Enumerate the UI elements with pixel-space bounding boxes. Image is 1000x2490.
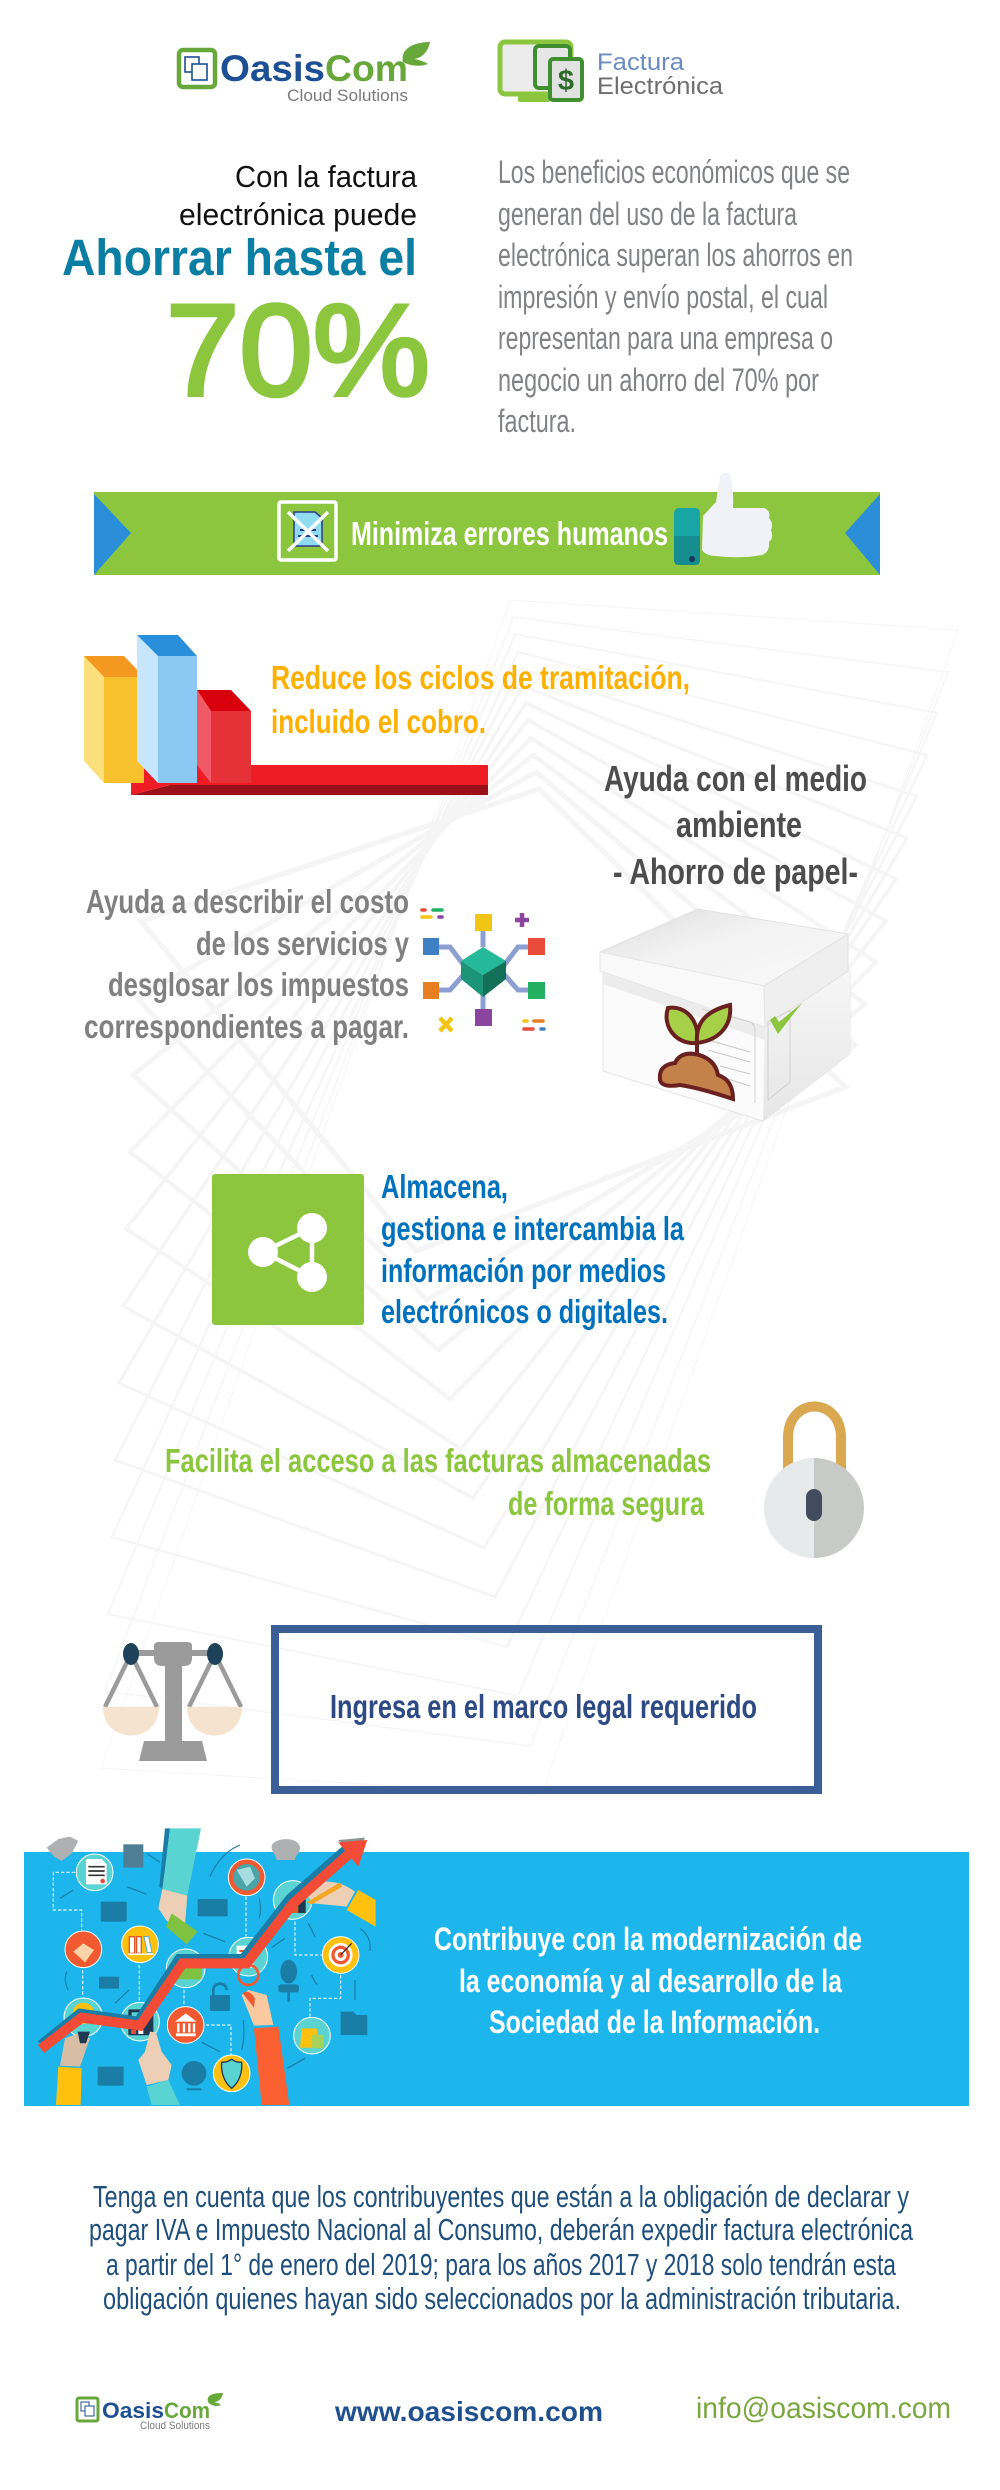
icon: crossed document xyxy=(279,502,336,560)
hands and sleeves xyxy=(56,1828,376,2105)
headline: ahorro 70%: Ahorrar hasta el xyxy=(62,229,417,286)
text block: aviso xyxy=(89,2179,914,2316)
panel: almacena xyxy=(212,1168,684,1330)
headline: ahorro 70%: 70% xyxy=(166,277,430,423)
banner ribbon xyxy=(94,492,880,575)
banner label: Minimiza errores humanos xyxy=(351,515,668,552)
text: almacena: información por medios xyxy=(381,1252,666,1289)
background icons xyxy=(98,1899,367,2090)
text: contribuye xyxy=(434,1921,862,2040)
text block: beneficios xyxy=(498,154,853,439)
text block: beneficios: electrónica superan los ahorros en xyxy=(498,237,853,273)
dashed connectors xyxy=(53,1872,341,2055)
footer logo xyxy=(77,2393,223,2432)
factura label: Factura xyxy=(597,49,685,76)
circle contents xyxy=(73,1859,353,2088)
text: facilita el acceso: Facilita el acceso a las facturas almacenadas xyxy=(165,1442,711,1479)
text: contribuye: Contribuye con la modernización de xyxy=(434,1921,862,1957)
text: describir el costo: Ayuda a describir el costo xyxy=(86,883,409,920)
bar base xyxy=(131,765,488,795)
chart: 3D bars xyxy=(84,635,488,795)
headline: ahorro 70% xyxy=(62,159,430,423)
text block: beneficios: representan para una empresa o xyxy=(498,320,833,356)
text: medio ambiente: Ayuda con el medio xyxy=(604,758,867,799)
text block: beneficios: Los beneficios económicos que se xyxy=(498,154,850,190)
icon: archive box with plant xyxy=(600,909,850,1121)
banner: minimiza errores humanos xyxy=(94,472,880,575)
logo mark xyxy=(179,50,215,87)
footer logo: Com xyxy=(164,2398,210,2423)
footer email: info@oasiscom.com xyxy=(696,2392,951,2425)
panel: marco legal xyxy=(275,1629,818,1790)
text: contribuye: Sociedad de la Información. xyxy=(489,2004,820,2040)
factura label xyxy=(597,49,724,100)
text: marco legal: Ingresa en el marco legal requerido xyxy=(330,1688,757,1725)
gray icons above band xyxy=(47,1837,300,1861)
text: describir el costo xyxy=(84,883,409,1045)
text: medio ambiente: - Ahorro de papel- xyxy=(613,851,858,892)
headline: ahorro 70%: electrónica puede xyxy=(179,197,417,232)
text: describir el costo: correspondientes a pagar. xyxy=(84,1008,409,1045)
logo: Factura Electrónica xyxy=(500,42,724,102)
footer website: www.oasiscom.com xyxy=(334,2396,603,2427)
text: almacena: Almacena, xyxy=(381,1168,508,1205)
green check xyxy=(770,1003,802,1034)
logo: OasisCom header xyxy=(179,42,430,105)
yellow bar xyxy=(84,656,144,783)
footer logo: Oasis xyxy=(102,2398,164,2423)
text: reduce los ciclos: incluido el cobro. xyxy=(271,703,486,740)
text: contribuye: la economía y al desarrollo de la xyxy=(459,1963,842,1999)
icon: padlock xyxy=(764,1406,864,1558)
panel: modernización band xyxy=(24,1852,969,2106)
text block: beneficios: factura. xyxy=(498,403,576,439)
text: describir el costo: desglosar los impuestos xyxy=(108,966,409,1003)
text: facilita el acceso xyxy=(165,1442,711,1522)
text: reduce los ciclos: Reduce los ciclos de tramitación, xyxy=(271,659,690,696)
plant on soil xyxy=(660,1005,733,1099)
text: reduce los ciclos xyxy=(271,659,690,740)
logo leaf xyxy=(403,42,430,66)
red growth arrow xyxy=(41,1840,367,2049)
footer logo: Cloud Solutions xyxy=(140,2420,210,2432)
small arrows xyxy=(60,1845,370,2068)
factura label: Electrónica xyxy=(597,73,724,100)
logo wordmark: Com xyxy=(325,48,408,89)
text: medio ambiente: ambiente xyxy=(676,804,802,845)
logo wordmark xyxy=(220,48,408,89)
text: almacena: electrónicos o digitales. xyxy=(381,1293,668,1330)
red bar xyxy=(197,690,251,783)
blue bar xyxy=(137,635,197,783)
arrow shadow xyxy=(41,1843,353,2045)
icon: monitor and tablet xyxy=(500,42,582,102)
logo wordmark: Oasis xyxy=(220,48,325,89)
icon: thumbs up xyxy=(674,472,772,565)
icon: hexagon network xyxy=(422,910,545,1031)
text block: beneficios: generan del uso de la factura xyxy=(498,196,797,232)
text block: beneficios: impresión y envío postal, el cual xyxy=(498,279,828,315)
text: medio ambiente xyxy=(604,758,867,892)
box body xyxy=(600,909,850,1121)
icon: share xyxy=(212,1174,364,1325)
illustration: economy network and hands xyxy=(41,1828,376,2105)
text: almacena: gestiona e intercambia la xyxy=(381,1210,684,1247)
logo tagline: Cloud Solutions xyxy=(287,86,408,105)
text: facilita el acceso: de forma segura xyxy=(508,1485,704,1522)
circle icons xyxy=(64,1854,359,2092)
text: almacena xyxy=(381,1168,684,1330)
icon: monitor and tablet: $ xyxy=(558,65,574,97)
text block: beneficios: negocio un ahorro del 70% por xyxy=(498,362,819,398)
headline: ahorro 70%: Con la factura xyxy=(235,159,418,194)
icon: balance scale xyxy=(103,1642,242,1761)
text: describir el costo: de los servicios y xyxy=(196,925,409,962)
